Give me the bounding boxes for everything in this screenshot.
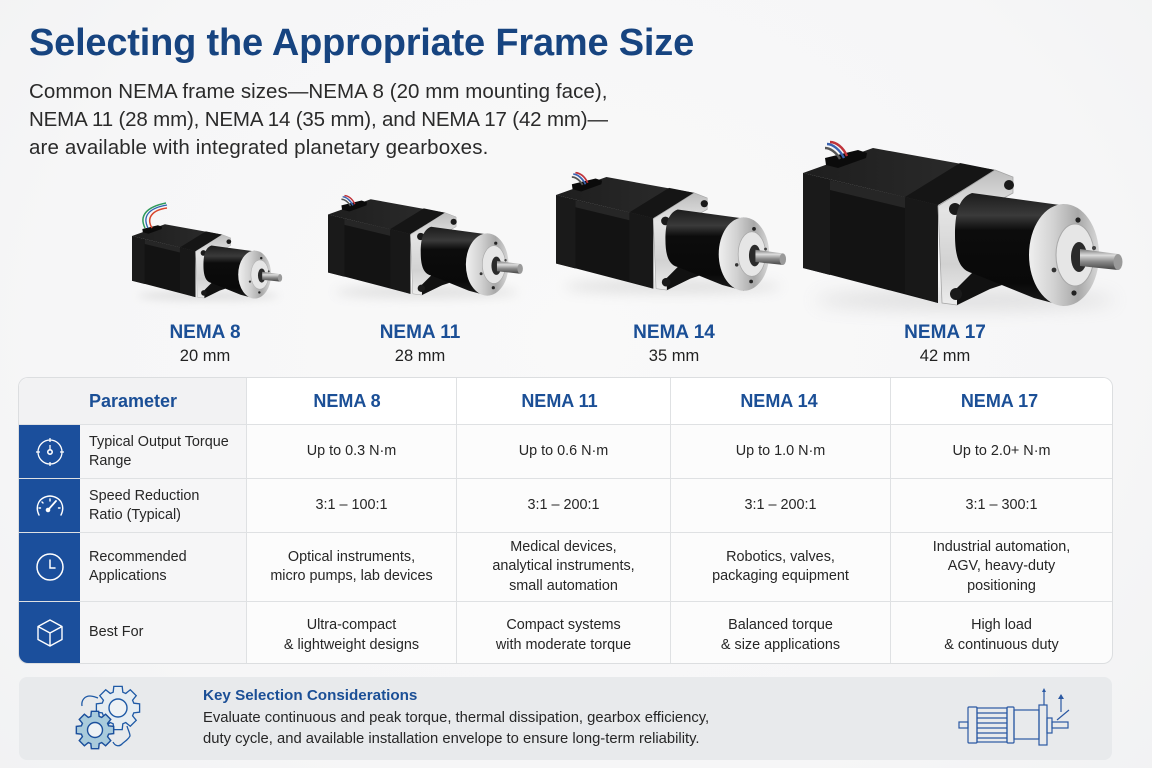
value: NEMA 14 <box>670 425 890 478</box>
value: NEMA 11: with moderate torque <box>496 636 631 652</box>
intro text: Common NEMA frame sizes—NEMA 8 (20 mm mounting face), <box>29 80 608 103</box>
header: NEMA 14 <box>670 378 890 424</box>
icon: motor schematic <box>958 688 1070 746</box>
icon: clock <box>19 532 80 601</box>
value: NEMA 17: High load <box>971 616 1032 632</box>
value: NEMA 8 <box>246 602 456 663</box>
key selection considerations banner <box>19 677 1112 760</box>
intro text: are available with integrated planetary gearboxes. <box>29 136 488 159</box>
value: NEMA 8: 3:1 – 100:1 <box>315 497 388 513</box>
value: NEMA 14: Up to 1.0 N·m <box>736 443 825 459</box>
header: NEMA 8: NEMA 8 <box>313 391 381 411</box>
motor label: NEMA 14: 35 mm <box>649 347 699 365</box>
value: NEMA 17 <box>890 479 1112 532</box>
row: best for <box>19 601 1112 663</box>
value: NEMA 14 <box>670 479 890 532</box>
header: Parameter <box>19 378 246 424</box>
parameter name <box>80 533 246 601</box>
table header row <box>19 378 1112 424</box>
motor image: NEMA 11 <box>328 194 523 300</box>
parameter name: Best For <box>89 624 143 640</box>
value: NEMA 11: Medical devices, <box>510 539 617 555</box>
row: speed reduction ratio <box>19 478 1112 532</box>
value: NEMA 14: Balanced torque <box>728 616 833 632</box>
key considerations text: duty cycle, and available installation envelope to ensure long-term reliability. <box>203 731 700 747</box>
value: NEMA 11 <box>456 533 670 601</box>
value: NEMA 17: Industrial automation, <box>933 539 1070 555</box>
value: NEMA 8: Ultra-compact <box>307 616 396 632</box>
value: NEMA 11: Up to 0.6 N·m <box>519 443 608 459</box>
value: NEMA 8: & lightweight designs <box>284 636 419 652</box>
value: NEMA 14: packaging equipment <box>712 568 849 584</box>
motor image: NEMA 14 <box>556 172 786 296</box>
value: NEMA 17 <box>890 602 1112 663</box>
value: NEMA 11: 3:1 – 200:1 <box>527 497 600 513</box>
title: Selecting the Appropriate Frame Size <box>29 22 694 64</box>
motor label: NEMA 17: 42 mm <box>920 347 970 365</box>
value: NEMA 17 <box>890 533 1112 601</box>
motor label: NEMA 11: NEMA 11 <box>380 322 460 343</box>
motor label: NEMA 8 <box>169 322 241 365</box>
icon: torque dial <box>19 424 80 478</box>
key considerations text <box>203 710 709 747</box>
header: NEMA 17: NEMA 17 <box>961 391 1038 411</box>
value: NEMA 17: AGV, heavy-duty <box>948 558 1055 574</box>
value: NEMA 17 <box>890 425 1112 478</box>
motor image: NEMA 8 <box>132 202 282 302</box>
header: Parameter: Parameter <box>89 391 177 411</box>
value: NEMA 14: Robotics, valves, <box>726 549 835 565</box>
intro text: NEMA 11 (28 mm), NEMA 14 (35 mm), and NEMA 17 (42 mm)— <box>29 108 608 131</box>
motor label: NEMA 14: NEMA 14 <box>633 322 715 343</box>
parameter name: Range <box>89 453 131 469</box>
row: typical output torque range <box>19 424 1112 478</box>
icon: speedometer <box>19 478 80 532</box>
motor label: NEMA 11: 28 mm <box>395 347 445 365</box>
value: NEMA 11 <box>456 425 670 478</box>
icon: cube <box>19 601 80 663</box>
value: NEMA 8 <box>246 479 456 532</box>
parameter name: Ratio (Typical) <box>89 507 181 523</box>
motor image: NEMA 17 <box>803 140 1122 314</box>
header: NEMA 11: NEMA 11 <box>521 391 598 411</box>
key considerations heading: Key Selection Considerations <box>203 687 417 704</box>
key considerations text: Evaluate continuous and peak torque, thermal dissipation, gearbox efficiency, <box>203 710 709 726</box>
parameter name <box>80 602 246 663</box>
motor label: NEMA 8: NEMA 8 <box>169 322 241 343</box>
value: NEMA 14 <box>670 533 890 601</box>
parameter name: Speed Reduction <box>89 488 199 504</box>
motor label: NEMA 17 <box>904 322 986 365</box>
value: NEMA 17: Up to 2.0+ N·m <box>952 443 1050 459</box>
parameter name: Typical Output Torque <box>89 434 229 450</box>
value: NEMA 8: Optical instruments, <box>288 549 415 565</box>
value: NEMA 8 <box>246 425 456 478</box>
value: NEMA 17: positioning <box>967 578 1036 594</box>
icon: gears <box>76 686 140 750</box>
comparison table <box>19 378 1112 663</box>
value: NEMA 14: & size applications <box>721 636 840 652</box>
value: NEMA 11: small automation <box>509 578 618 594</box>
motor label: NEMA 17: NEMA 17 <box>904 322 986 343</box>
value: NEMA 11: analytical instruments, <box>492 558 635 574</box>
intro text <box>29 80 608 159</box>
header: NEMA 8 <box>246 378 456 424</box>
header: NEMA 14: NEMA 14 <box>740 391 818 411</box>
value: NEMA 17: & continuous duty <box>944 636 1059 652</box>
value: NEMA 14 <box>670 602 890 663</box>
motor label: NEMA 8: 20 mm <box>180 347 230 365</box>
value: NEMA 11 <box>456 602 670 663</box>
header: NEMA 11 <box>456 378 670 424</box>
value: NEMA 8: micro pumps, lab devices <box>270 568 433 584</box>
value: NEMA 14: 3:1 – 200:1 <box>744 497 817 513</box>
header: NEMA 17 <box>890 378 1112 424</box>
value: NEMA 11 <box>456 479 670 532</box>
parameter name: Applications <box>89 568 167 584</box>
parameter name <box>80 479 246 532</box>
value: NEMA 8 <box>246 533 456 601</box>
value: NEMA 17: 3:1 – 300:1 <box>965 497 1038 513</box>
parameter name: Recommended <box>89 549 187 565</box>
value: NEMA 8: Up to 0.3 N·m <box>307 443 396 459</box>
row: recommended applications <box>19 532 1112 601</box>
value: NEMA 11: Compact systems <box>506 616 621 632</box>
motor label: NEMA 14 <box>633 322 715 365</box>
motor label: NEMA 11 <box>380 322 460 365</box>
parameter name <box>80 425 246 478</box>
